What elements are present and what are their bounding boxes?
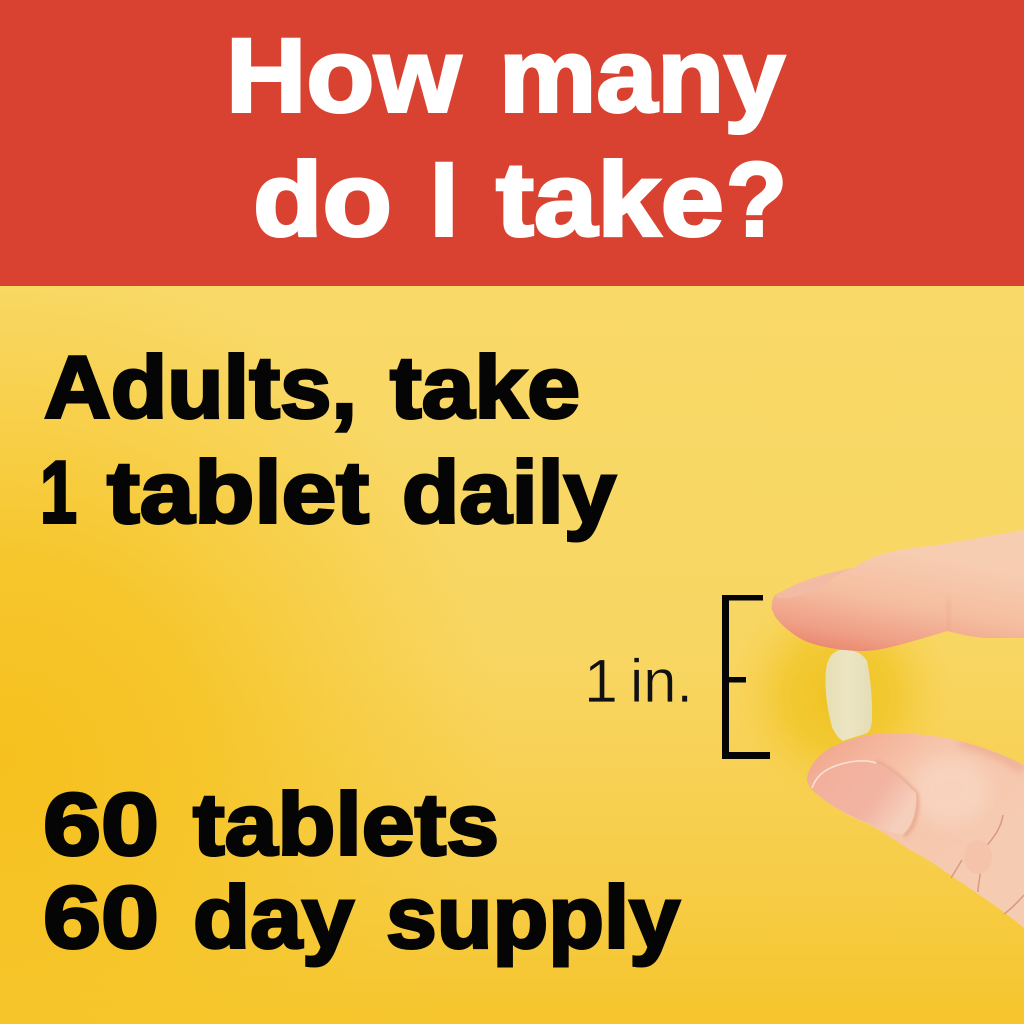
dosage text: take bbox=[390, 338, 580, 436]
size label: in. bbox=[630, 647, 693, 715]
tablet bbox=[825, 650, 872, 741]
supply text: 60 bbox=[43, 868, 159, 966]
knuckle crease bbox=[947, 600, 950, 632]
dosage text: tablet bbox=[107, 442, 369, 542]
title bbox=[226, 18, 787, 258]
supply text bbox=[43, 774, 680, 966]
header band bbox=[0, 0, 1024, 286]
title: ? bbox=[726, 142, 787, 258]
lower finger bbox=[807, 733, 1024, 928]
title: I bbox=[430, 142, 458, 258]
size bracket bbox=[722, 595, 770, 759]
edge shading bbox=[960, 741, 1024, 770]
thumbnail bbox=[811, 761, 916, 835]
title: take bbox=[496, 142, 724, 258]
nail rim bbox=[812, 761, 876, 788]
yellow gradient background bbox=[0, 286, 1024, 1024]
supply text: day bbox=[193, 868, 354, 966]
fingernail bbox=[775, 568, 853, 598]
upper finger bbox=[772, 530, 1024, 651]
dosage text: Adults, bbox=[44, 338, 357, 436]
title: many bbox=[499, 18, 785, 134]
nail shadow bbox=[876, 762, 917, 836]
supply text: supply bbox=[386, 868, 680, 966]
size label: 1 bbox=[584, 647, 618, 715]
skin fold bbox=[964, 840, 992, 874]
dosage text: daily bbox=[402, 442, 616, 542]
supply text: 60 bbox=[43, 774, 159, 874]
title: do bbox=[253, 142, 392, 258]
dosage text bbox=[40, 338, 616, 542]
dosage text: 1 bbox=[40, 442, 77, 542]
size label bbox=[584, 647, 693, 715]
supply text: tablets bbox=[193, 774, 499, 874]
knuckle creases bbox=[951, 815, 1024, 914]
skin highlight bbox=[910, 755, 990, 825]
title: How bbox=[226, 18, 461, 134]
